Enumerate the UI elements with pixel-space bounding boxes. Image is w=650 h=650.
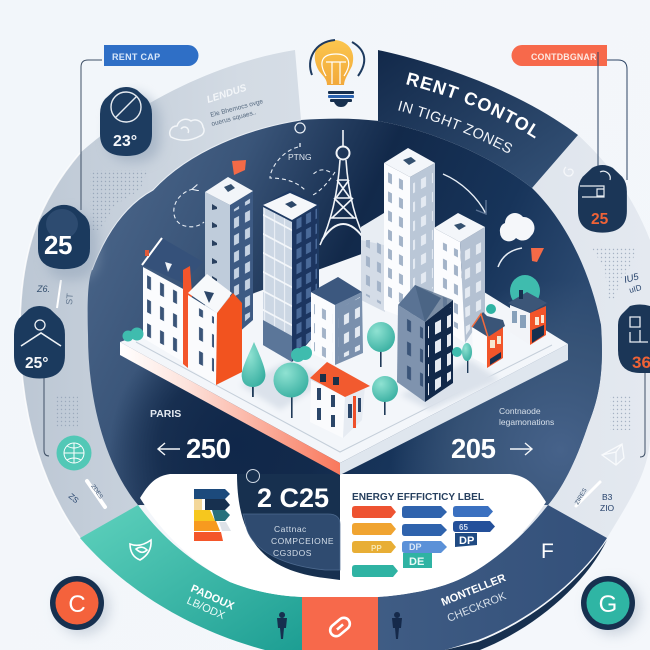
- card text: CG3DOS: [273, 548, 312, 558]
- number: 205: 205: [451, 433, 496, 464]
- dark central disc: [88, 119, 602, 505]
- icon: cloud right: [500, 213, 534, 241]
- label: right scribble 2: uID: [628, 283, 643, 295]
- connector: left badge: [44, 378, 49, 456]
- text: small copy: [210, 98, 264, 128]
- label: lower right pill: [575, 482, 600, 506]
- icon: box outline: [602, 444, 624, 465]
- label: lower right numbers: [600, 492, 615, 513]
- white lower panel: [140, 474, 546, 597]
- title: rent control: RENT CONTOL: [406, 72, 536, 138]
- city platform: [120, 240, 568, 475]
- dot grid: right upper: [592, 248, 637, 300]
- text: small copy: Ele Bhemocs ovge: [210, 98, 264, 119]
- platform left side: [120, 342, 340, 475]
- card inner panel: [243, 514, 340, 570]
- label: lower right pill: ZIRES: [575, 488, 589, 506]
- icon: person: [392, 612, 402, 639]
- disc edge highlight: [92, 120, 301, 270]
- building: right mid gray: [361, 213, 385, 312]
- dot grid: right lower: [610, 396, 632, 430]
- energy bars: [352, 506, 495, 577]
- energy ladder icon: [194, 489, 231, 541]
- pill: rent cap: RENT CAP: [112, 52, 160, 62]
- icon: light bulb: [310, 40, 364, 107]
- connector: contdbgnar: [598, 52, 627, 180]
- dot grid: upper left: [90, 170, 148, 230]
- button: G: G: [599, 591, 617, 618]
- building: orange gable house: [188, 274, 242, 385]
- platform right side: [340, 344, 568, 475]
- label: lower left pill: ZDES: [89, 484, 103, 500]
- arrow: right: [510, 443, 532, 455]
- label: lower right numbers: ZIO: [600, 503, 615, 513]
- eiffel tower: [320, 130, 368, 245]
- heading: 2 C25: 2 C25: [257, 483, 329, 513]
- pill: contdbgnar: [512, 45, 607, 66]
- badge: 36: [618, 304, 650, 373]
- icon: teal globe: [56, 436, 92, 470]
- card text: [271, 524, 334, 558]
- badge: 23 degrees: 23°: [113, 133, 137, 150]
- label: padoux: PADOUX: [189, 583, 237, 613]
- card text: Cattnac: [274, 524, 307, 534]
- label: lb/odx: LB/ODX: [185, 595, 227, 622]
- label: right caption: legamonations: [499, 417, 554, 427]
- curved accent right: [498, 248, 522, 267]
- text: small copy: ouerus squaes..: [211, 109, 257, 128]
- button: C: [50, 576, 110, 635]
- button: G: [581, 576, 641, 635]
- tree: back round: [367, 322, 395, 367]
- building: teal dome house: [508, 275, 547, 345]
- heading: energy label: ENERGY EFFFICTICY LBEL: [352, 492, 485, 503]
- label: left vertical marks: ST: [64, 292, 75, 305]
- label: right caption: [499, 406, 554, 427]
- ring white outer highlight: [20, 153, 80, 538]
- building: small orange house: [472, 304, 505, 368]
- letter F: F: [541, 540, 554, 563]
- badge: 25 degrees: 25°: [25, 355, 48, 372]
- bar label: DP: [409, 542, 422, 552]
- connector: rent cap: [81, 60, 102, 210]
- label: lower right numbers: B3: [602, 492, 613, 502]
- orange band: [302, 597, 378, 650]
- light outer ring: [20, 50, 650, 538]
- bar label: DE: [409, 556, 424, 568]
- bar label: 65: [459, 523, 468, 532]
- building: dark front block: [397, 285, 453, 402]
- tree: cone: [242, 342, 265, 397]
- building: gray tower: [205, 177, 253, 340]
- connector: right badge: [640, 372, 645, 457]
- label: right caption: Contnaode: [499, 406, 541, 416]
- icon: person: [277, 612, 287, 639]
- label: lower left small: ZS: [67, 492, 80, 505]
- annotations: dashed arrows: [174, 147, 335, 227]
- number: 250: 250: [186, 433, 231, 464]
- band dark rim: [445, 540, 607, 650]
- building: glass tower: [263, 190, 319, 362]
- platform path lines: [136, 342, 552, 452]
- arrow: left: [158, 443, 180, 455]
- building: red roof house: [310, 362, 370, 438]
- header band: rent control: [378, 50, 578, 188]
- building: gray-roof block center: [311, 277, 363, 365]
- pill: contdbgnar: CONTDBGNAR: [531, 52, 597, 62]
- badge: 25: [38, 205, 98, 280]
- building: tall white tower: [384, 148, 435, 320]
- pill: rent cap: [104, 45, 198, 66]
- curved arrow top right: [443, 174, 486, 214]
- card: 2C25: [237, 470, 340, 580]
- platform top: [120, 240, 568, 463]
- label: paris: PARIS: [150, 408, 181, 420]
- badge: orange 25: [578, 165, 627, 233]
- badge: 25: 25: [44, 230, 72, 260]
- bar label: DP: [459, 535, 474, 547]
- platform shadows: [240, 360, 500, 410]
- building: haussmann white: [142, 238, 203, 368]
- label: checkrok: CHECKROK: [446, 590, 509, 625]
- dot grid: left lower: [56, 396, 78, 428]
- subtitle: in tight zones: IN TIGHT ZONES: [398, 100, 512, 153]
- teal band: padoux: [80, 505, 302, 650]
- label: left vertical marks: Z6.: [36, 284, 50, 294]
- text: lendus: LENDUS: [206, 83, 248, 106]
- icon: orange flag right: [531, 248, 544, 262]
- tree: round left: [274, 362, 308, 418]
- tree: round right: [372, 376, 398, 415]
- label: monteller: MONTELLER: [440, 572, 508, 609]
- icon: cloud outline: [170, 119, 204, 140]
- icon: map pin: [295, 123, 305, 147]
- building: white tower right: [434, 213, 485, 343]
- label: ptng: PTNG: [288, 152, 312, 162]
- icon: shield: [130, 540, 151, 560]
- label: left vertical marks: [36, 280, 75, 308]
- icon: link: [328, 615, 352, 639]
- label: right scribble: IU5: [623, 271, 641, 286]
- text: lendus: [206, 83, 264, 128]
- navy band: monteller: [378, 505, 607, 650]
- bar label: PP: [371, 544, 382, 553]
- icon: orange flag left: [232, 160, 246, 175]
- icon: small swirl: [564, 167, 573, 176]
- button: C: C: [68, 591, 86, 618]
- ring marker: [246, 470, 260, 482]
- badge: orange 25: 25: [591, 211, 609, 228]
- bushes: [122, 328, 312, 362]
- label: lower left pill: [87, 481, 105, 507]
- badge: 23 degrees: [100, 87, 160, 162]
- card text: COMPCEIONE: [271, 536, 334, 546]
- tree: small right: [452, 343, 472, 373]
- badge: 25 degrees: [14, 306, 65, 378]
